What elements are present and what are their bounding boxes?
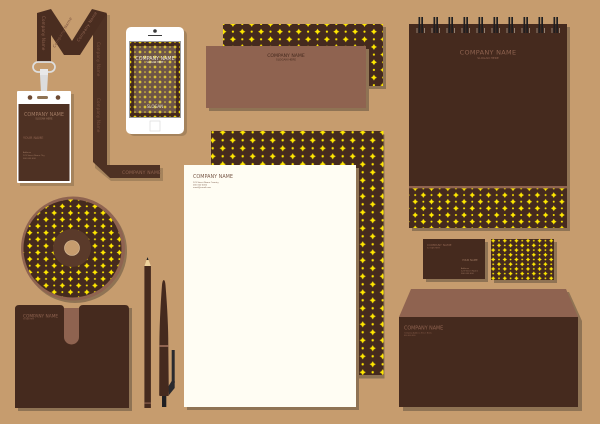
lanyard: Company Name	[96, 98, 101, 133]
pencil	[144, 257, 151, 408]
cd sleeve	[15, 305, 132, 411]
badge clip	[33, 62, 55, 92]
letterhead: 123 Street Name Country	[193, 181, 219, 184]
lanyard: Company Name	[76, 10, 98, 43]
smartphone: SLOGAN HERE	[146, 61, 164, 64]
id badge: 123 Street Name City	[23, 154, 45, 157]
business card front: 000 000 000	[461, 273, 474, 275]
business card back	[491, 239, 557, 283]
lanyard: Company Name	[41, 16, 46, 51]
business card front: COMPANY NAME	[427, 243, 452, 247]
lanyard: COMPANY NAME	[122, 170, 161, 176]
id badge: 000 000 000	[23, 158, 36, 160]
lanyard: Company Name	[96, 42, 101, 77]
smartphone: COMPANY NAME	[135, 56, 175, 62]
cd sleeve: SLOGAN HERE	[23, 318, 34, 320]
id badge: Address	[23, 151, 31, 154]
compact disc	[21, 196, 127, 303]
mailing envelope: COMPANY NAME	[404, 326, 443, 332]
lanyard: Company Name	[52, 16, 73, 48]
long envelope	[206, 46, 369, 111]
notebook: SLOGAN HERE	[477, 56, 499, 60]
id badge: YOUR NAME	[23, 136, 43, 140]
notebook spiral binding	[416, 17, 560, 33]
business card front: Address	[461, 267, 469, 270]
letterhead: COMPANY NAME	[193, 174, 233, 180]
cd sleeve: COMPANY NAME	[23, 314, 58, 320]
business card front	[423, 239, 488, 282]
long envelope: COMPANY NAME	[267, 53, 305, 59]
letterhead	[184, 165, 359, 410]
business card front: YOUR NAME	[462, 258, 478, 262]
notebook: COMPANY NAME	[460, 48, 516, 56]
id badge: SLOGAN HERE	[35, 118, 53, 120]
letterhead: email@email.com	[193, 187, 211, 189]
long envelope: SLOGAN HERE	[276, 58, 296, 62]
business card front: SLOGAN HERE	[427, 246, 441, 250]
letterhead pattern back	[211, 131, 384, 378]
smartphone	[126, 27, 187, 136]
letterhead: 000 000 0000	[193, 184, 208, 186]
mailing envelope	[399, 289, 582, 411]
notebook	[409, 17, 570, 231]
business card front: 123 Street Name	[461, 270, 479, 272]
mailing envelope: 000 000 000	[404, 335, 416, 337]
mailing envelope: Company Address Street Name	[404, 332, 433, 334]
id badge: COMPANY NAME	[24, 112, 64, 118]
lanyard	[37, 9, 163, 181]
id badge	[17, 91, 74, 186]
smartphone: SLOGAN	[147, 104, 163, 109]
pen	[159, 280, 175, 407]
envelope pattern back	[223, 24, 386, 89]
